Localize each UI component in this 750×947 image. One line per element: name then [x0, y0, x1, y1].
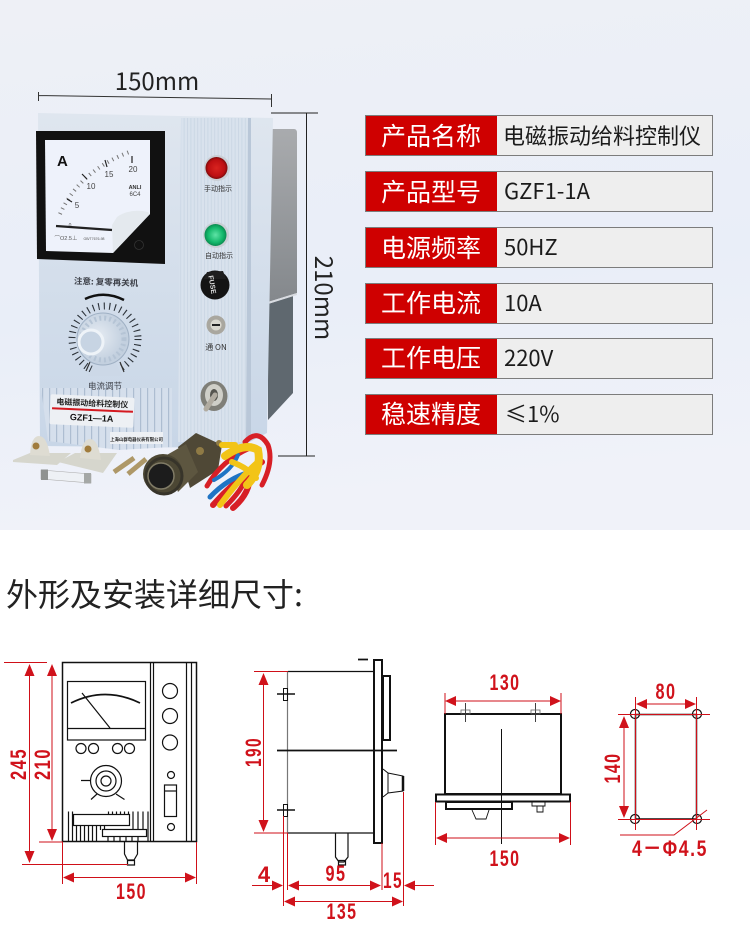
label: 4: 4 — [258, 862, 272, 887]
label: 210: 210 — [30, 748, 55, 780]
dial arc — [85, 295, 124, 300]
dial caption: 电流调节 — [88, 380, 122, 392]
spec row: product name: 产品名称 — [381, 117, 481, 153]
photo: controller unit: 通 ON — [205, 342, 227, 353]
dimension: height 210mm — [271, 113, 343, 456]
front panel — [38, 113, 273, 448]
fuse holder — [200, 270, 230, 300]
adjustment dial — [72, 306, 138, 376]
spec row: model: GZF1-1A — [504, 174, 591, 206]
spec row: voltage: 工作电压 — [381, 339, 481, 375]
drawing: top view — [436, 670, 570, 871]
ammeter — [36, 131, 165, 264]
name plate: 电磁振动给料控制仪 — [56, 396, 128, 411]
dimension: width 150mm — [38, 62, 272, 107]
label: 95: 95 — [326, 861, 346, 886]
ammeter: A — [57, 153, 68, 170]
spec row: precision: 稳速精度 — [381, 395, 481, 431]
drawing: mounting holes — [600, 679, 710, 861]
spec row: voltage: 220V — [504, 341, 554, 373]
ammeter: ANLI — [129, 185, 142, 191]
photo: screws — [114, 458, 146, 474]
label: 245: 245 — [6, 748, 31, 780]
panel: product photo background — [0, 0, 750, 530]
ammeter: 10 — [87, 182, 96, 191]
label: 190: 190 — [241, 737, 266, 767]
rear housing — [268, 129, 297, 302]
maker label — [110, 432, 163, 444]
label: 140: 140 — [600, 752, 625, 784]
green indicator lamp — [203, 222, 229, 248]
drawing: side view — [241, 660, 434, 924]
ammeter: 20 — [129, 165, 138, 174]
label: 15: 15 — [383, 868, 403, 893]
photo: controller unit — [36, 113, 297, 450]
spec row: frequency — [366, 228, 712, 268]
label: 150: 150 — [490, 846, 520, 871]
photo: controller unit: 自动指示 — [205, 251, 233, 261]
spec row: precision — [366, 394, 712, 434]
ammeter: ⌒O2.5⊥ — [55, 235, 77, 242]
spec row: model — [366, 172, 712, 212]
ribbed name plate area — [41, 388, 172, 450]
ammeter: GB/T7676-98 — [83, 237, 105, 241]
name plate: GZF1—1A — [70, 412, 114, 424]
photo: controller unit: 手动指示 — [204, 184, 232, 194]
spec row: frequency: 50HZ — [504, 230, 558, 262]
maker label: 上海山群电器仪表有限公司 — [110, 436, 163, 443]
spec row: current — [366, 284, 712, 324]
spec row: product name: 电磁振动给料控制仪 — [503, 119, 701, 151]
ammeter: 0 — [69, 223, 72, 229]
spec row: precision: ≤1% — [505, 397, 559, 429]
drawing: front view — [4, 662, 196, 904]
ammeter: 5 — [75, 201, 80, 210]
ammeter: 15 — [105, 170, 114, 179]
spec row: current: 10A — [504, 286, 542, 318]
small toggle switch — [206, 316, 226, 334]
ribbed strip — [178, 118, 248, 442]
label: 4-Φ4.5: 4－Φ4.5 — [632, 836, 708, 861]
dimension: height 210mm: 210mm — [308, 256, 343, 340]
ammeter: 6C4 — [129, 192, 141, 198]
large toggle switch — [200, 381, 228, 411]
fuse holder: FUSE — [206, 275, 217, 295]
photo: coloured wires — [207, 436, 270, 508]
dimension: width 150mm: 150mm — [115, 62, 199, 97]
label: 130: 130 — [490, 670, 520, 695]
warning text: 注意: 复零再关机 — [74, 275, 139, 289]
photo: glass fuse — [41, 470, 91, 484]
spec row: frequency: 电源频率 — [381, 229, 481, 265]
photo: mounting brackets — [13, 436, 117, 473]
label: 150: 150 — [116, 879, 147, 904]
label: 80: 80 — [656, 679, 676, 704]
spec row: product name — [366, 116, 712, 156]
spec row: current: 工作电流 — [381, 284, 481, 320]
photo: connector — [143, 433, 222, 494]
spec row: model: 产品型号 — [381, 173, 481, 209]
label: 135: 135 — [326, 899, 358, 924]
spec row: voltage — [366, 338, 712, 378]
heading: installation dimensions: 外形及安装详细尺寸: — [6, 570, 303, 616]
name plate — [49, 394, 135, 428]
red indicator lamp — [204, 155, 230, 181]
